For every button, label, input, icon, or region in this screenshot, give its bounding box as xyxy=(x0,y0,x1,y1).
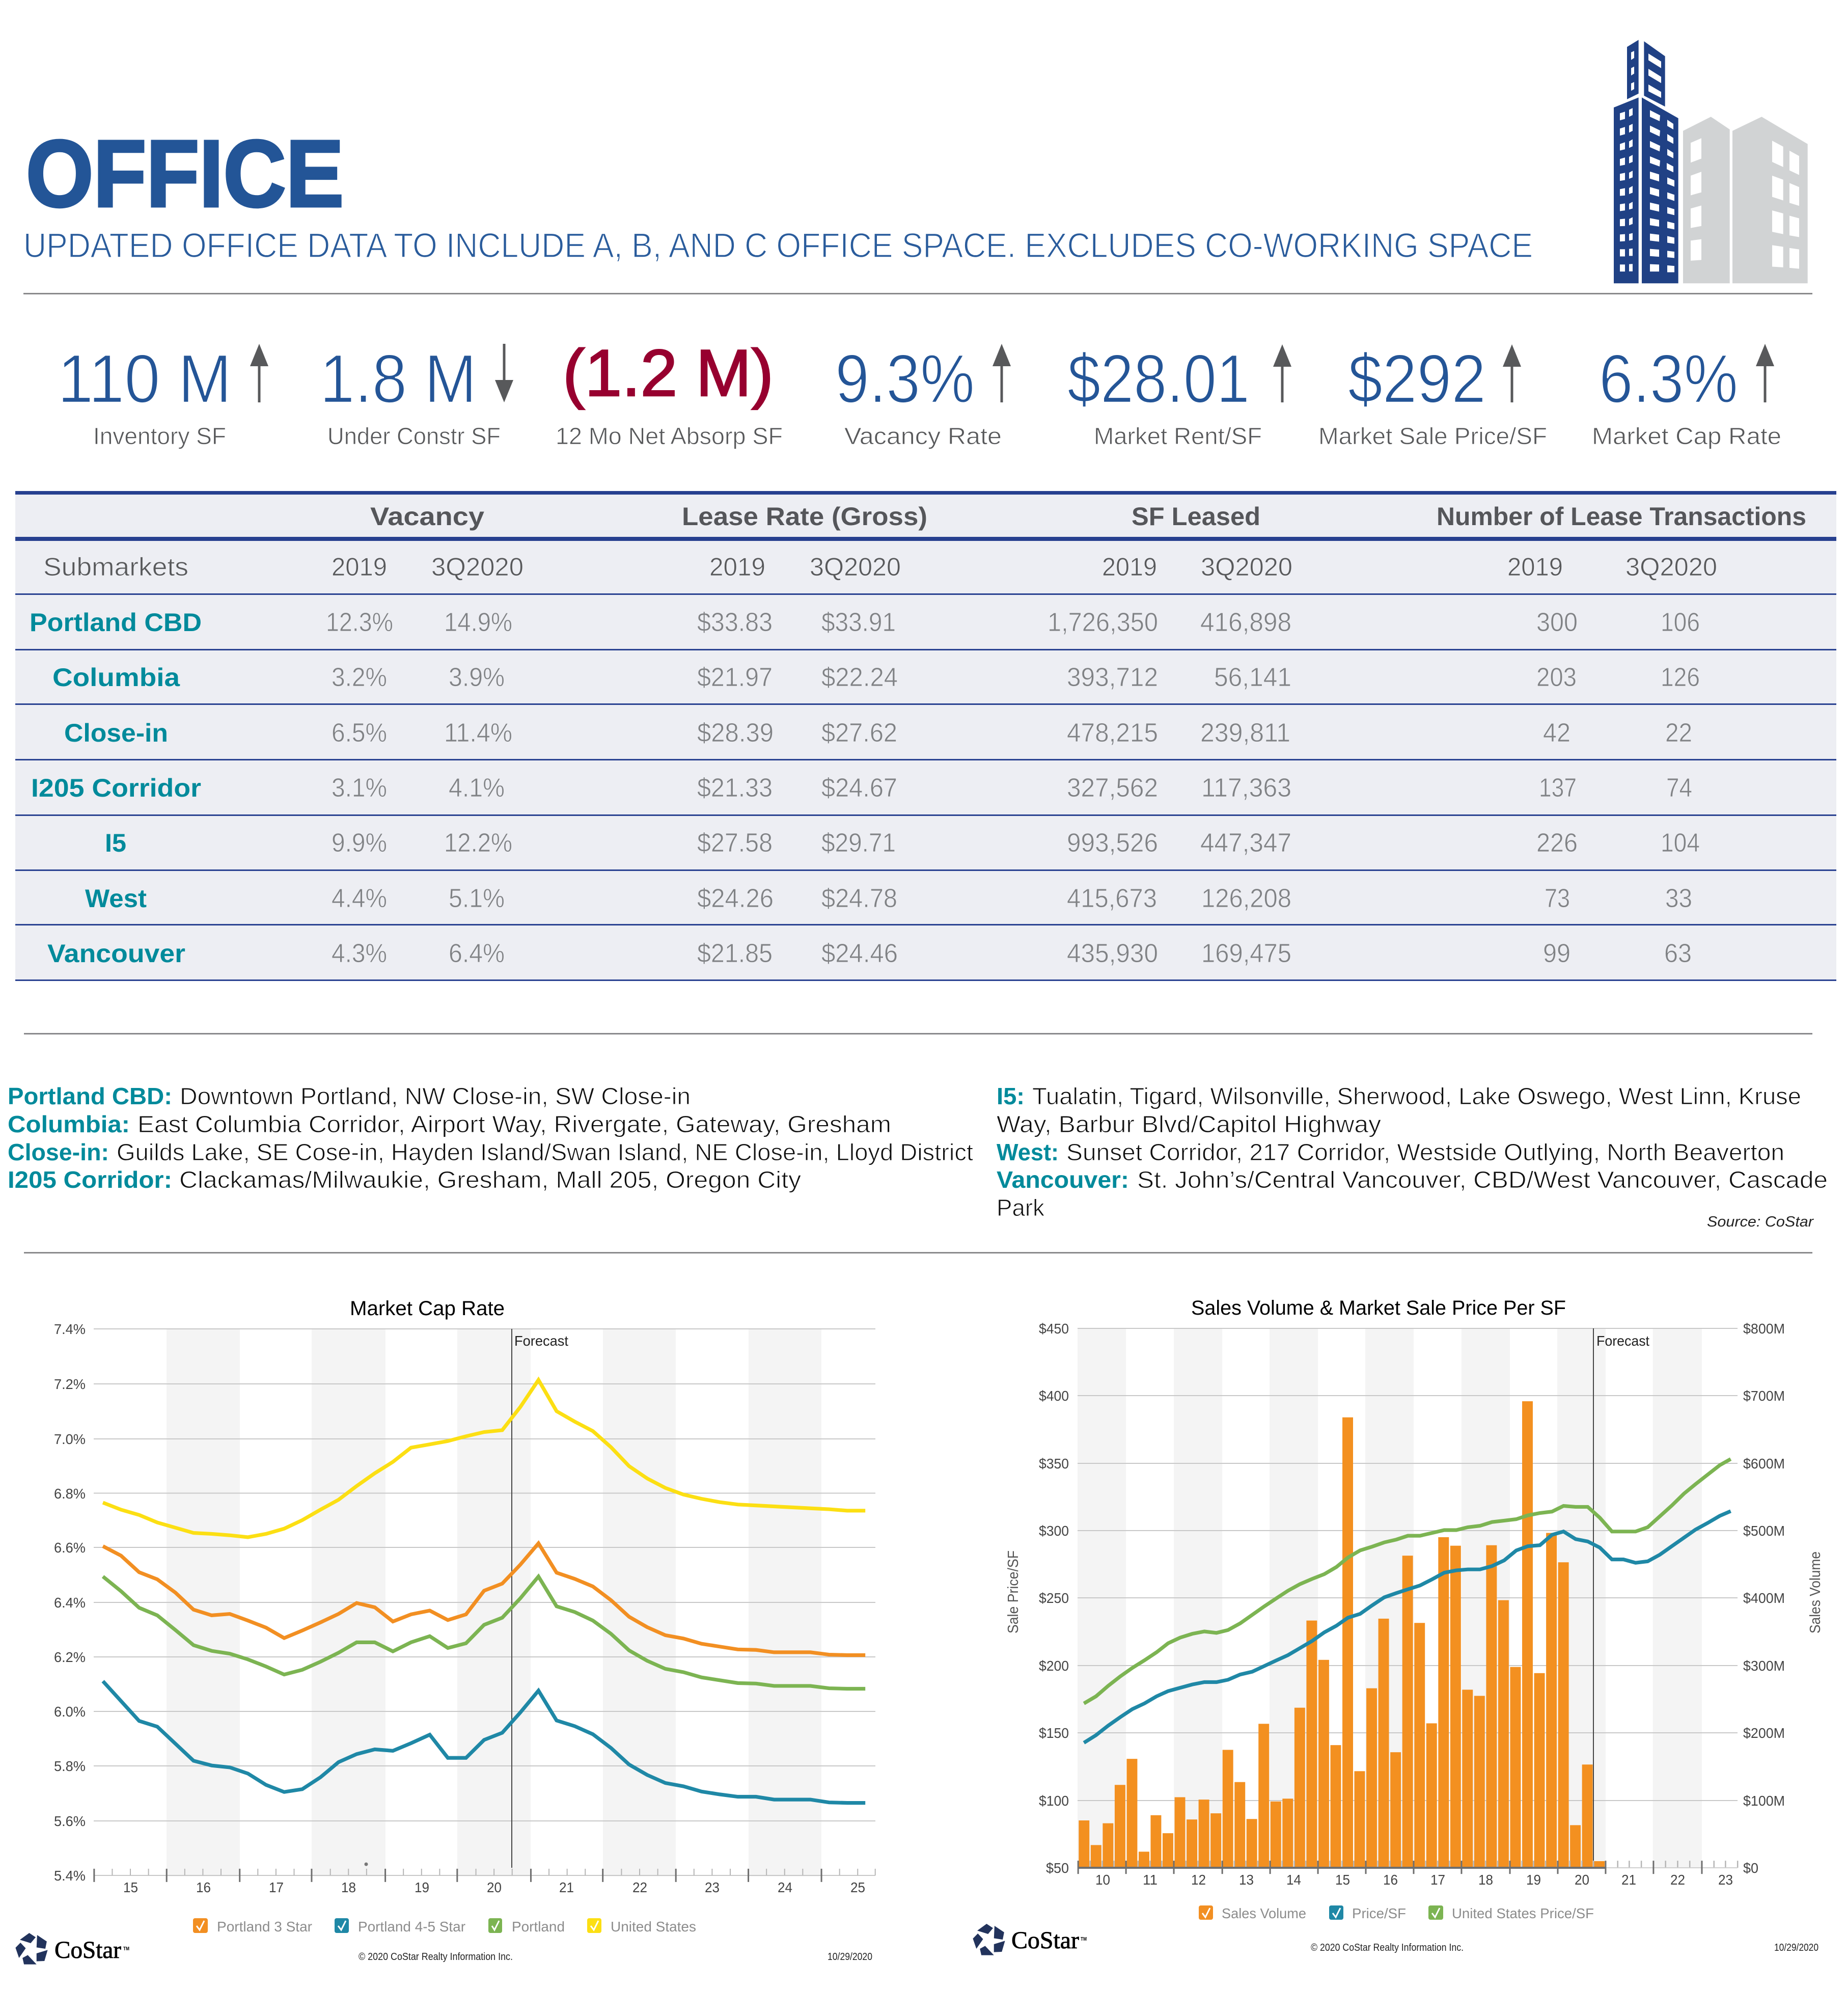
KPI: net absorption: (1.2 M) xyxy=(563,336,774,410)
x axis labels: 11 xyxy=(1143,1872,1158,1888)
row: Close-in: 11.4% xyxy=(444,718,512,748)
text block: submarket definitions right: St. John’s/Central Vancouver, CBD/West Vancouver, Cascade xyxy=(1137,1166,1828,1193)
title: OFFICE xyxy=(26,121,344,227)
logo: CoStar: TM xyxy=(1081,1937,1087,1942)
logo: CoStar: CoStar xyxy=(1011,1927,1079,1954)
row: West: 4.4% xyxy=(332,884,387,913)
right axis labels: $200M xyxy=(1743,1725,1785,1741)
x axis labels: 14 xyxy=(1286,1872,1301,1888)
KPI: sale price xyxy=(1318,340,1547,449)
y axis labels: 5.8% xyxy=(54,1758,86,1774)
text block: submarket definitions left: Portland CBD: xyxy=(8,1083,172,1109)
row: West: 415,673 xyxy=(1067,884,1157,913)
row: Vancouver: $21.85 xyxy=(697,939,773,968)
left axis labels xyxy=(1039,1321,1069,1876)
forecast marker: Forecast xyxy=(514,1333,568,1349)
x axis labels: 10 xyxy=(1095,1872,1110,1888)
row: West: West xyxy=(85,884,147,913)
row: Portland CBD xyxy=(30,608,1700,637)
text block: submarket definitions left: Close-in: xyxy=(8,1139,109,1165)
legend: Portland 3 Star xyxy=(217,1919,312,1935)
row: Vancouver: 4.3% xyxy=(332,939,387,968)
row: I205 Corridor: 3.1% xyxy=(332,773,387,803)
row: I205 Corridor: I205 Corridor xyxy=(31,774,201,802)
x axis labels: 15 xyxy=(1335,1872,1350,1888)
row: Columbia: Columbia xyxy=(52,663,180,692)
left axis labels: $300 xyxy=(1039,1523,1069,1539)
data lines xyxy=(1084,1459,1731,1743)
subtitle: UPDATED OFFICE DATA TO INCLUDE A, B, AND C OFFICE SPACE. EXCLUDES CO-WORKING SPACE xyxy=(23,226,1533,265)
copyright: © 2020 CoStar Realty Information Inc. xyxy=(1311,1942,1464,1953)
x axis labels: 21 xyxy=(559,1879,574,1895)
date: 10/29/2020 xyxy=(828,1951,872,1963)
row: West xyxy=(85,884,1692,913)
x axis labels: 18 xyxy=(341,1879,356,1895)
x axis labels: 23 xyxy=(1718,1872,1733,1888)
row: West: 5.1% xyxy=(449,884,505,913)
KPI: inventory xyxy=(58,340,268,449)
row: Close-in: Close-in xyxy=(64,719,168,747)
text block: submarket definitions right: Park xyxy=(997,1194,1045,1221)
text block: submarket definitions left: I205 Corridor: xyxy=(8,1166,172,1193)
line: price per SF xyxy=(1084,1511,1731,1743)
row: Close-in: 42 xyxy=(1543,718,1571,748)
table column headers: 3Q2020 xyxy=(431,553,524,581)
row: Vancouver: $24.46 xyxy=(821,939,898,968)
row: I205 Corridor: 117,363 xyxy=(1201,773,1291,803)
chart: sales volume and market sale price xyxy=(973,1297,1824,1955)
legend xyxy=(193,1918,696,1935)
left axis labels: $350 xyxy=(1039,1456,1069,1472)
x axis labels: 23 xyxy=(705,1879,720,1895)
y axis labels: 7.0% xyxy=(54,1431,86,1447)
row: I205 Corridor: 74 xyxy=(1666,773,1692,803)
legend xyxy=(1199,1905,1594,1921)
x axis labels: 16 xyxy=(196,1879,211,1895)
text block: submarket definitions right xyxy=(997,1083,1828,1221)
table column headers: 3Q2020 xyxy=(1201,553,1292,581)
x axis labels: 20 xyxy=(1575,1872,1589,1888)
row: Vancouver: Vancouver xyxy=(47,939,185,968)
line: United States price per SF xyxy=(1084,1459,1731,1703)
table group headers: Number of Lease Transactions xyxy=(1437,502,1806,531)
logo: CoStar xyxy=(15,1933,129,1965)
y axis labels: 5.4% xyxy=(54,1868,86,1884)
row: Close-in: 239,811 xyxy=(1200,718,1290,748)
text block: submarket definitions right: Way, Barbur Blvd/Capitol Highway xyxy=(997,1111,1381,1137)
legend: United States xyxy=(611,1919,696,1935)
axis title: Sales Volume: Sales Volume xyxy=(1807,1551,1824,1633)
right axis labels: $500M xyxy=(1743,1523,1785,1539)
row: West: 126,208 xyxy=(1201,884,1291,913)
KPI: market rent xyxy=(1067,340,1291,449)
legend: Price/SF xyxy=(1352,1905,1406,1921)
right axis labels: $400M xyxy=(1743,1590,1785,1606)
text block: submarket definitions right: Sunset Corridor, 217 Corridor, Westside Outlying, North Beaverton xyxy=(1066,1139,1784,1165)
row: Portland CBD: Portland CBD xyxy=(30,608,202,637)
row: Portland CBD: 106 xyxy=(1661,608,1700,637)
left axis labels: $100 xyxy=(1039,1793,1069,1809)
row: I205 Corridor: 137 xyxy=(1539,773,1577,803)
x axis labels: 18 xyxy=(1478,1872,1493,1888)
x axis labels: 19 xyxy=(1526,1872,1541,1888)
row: West: $24.78 xyxy=(821,884,897,913)
row: Close-in: 478,215 xyxy=(1067,718,1158,748)
KPI: sale price: Market Sale Price/SF xyxy=(1318,423,1547,449)
x axis labels: 17 xyxy=(269,1879,284,1895)
right axis labels: $600M xyxy=(1743,1456,1785,1472)
row: I5: 993,526 xyxy=(1067,828,1158,858)
table column headers: 3Q2020 xyxy=(810,553,901,581)
table column headers: 2019 xyxy=(709,553,765,581)
chart: market cap rate xyxy=(15,1297,875,1965)
left axis labels: $250 xyxy=(1039,1590,1069,1606)
y axis labels: 7.4% xyxy=(54,1321,86,1337)
x axis ticks xyxy=(1078,1861,1738,1874)
row: Portland CBD: 12.3% xyxy=(326,608,393,637)
row: I5: $29.71 xyxy=(821,828,896,858)
row: Columbia: 3.9% xyxy=(449,663,505,692)
row: West: 33 xyxy=(1665,884,1692,913)
y axis labels: 5.6% xyxy=(54,1813,86,1829)
KPI: cap rate: 6.3% xyxy=(1599,340,1738,417)
x axis labels: 25 xyxy=(850,1879,865,1895)
right axis labels xyxy=(1743,1321,1785,1876)
legend: Sales Volume xyxy=(1222,1905,1306,1921)
x axis labels: 17 xyxy=(1430,1872,1445,1888)
logo: CoStar: TM xyxy=(123,1946,129,1952)
data lines xyxy=(103,1380,865,1803)
row: Close-in xyxy=(64,718,1692,748)
y axis labels: 6.8% xyxy=(54,1486,86,1502)
text block: submarket definitions left: Guilds Lake, SE Cose-in, Hayden Island/Swan Island, NE Close-in, Lloyd District xyxy=(117,1139,973,1165)
text block: submarket definitions left: Clackamas/Milwaukie, Gresham, Mall 205, Oregon City xyxy=(179,1166,801,1193)
line: Portland 4-5 Star xyxy=(103,1681,865,1803)
row: Close-in: 6.5% xyxy=(332,718,387,748)
KPI: cap rate: Market Cap Rate xyxy=(1592,423,1781,449)
table column headers: 2019 xyxy=(332,553,387,581)
x axis labels: 21 xyxy=(1621,1872,1636,1888)
row: I205 Corridor xyxy=(31,773,1692,803)
row: I205 Corridor: 327,562 xyxy=(1067,773,1158,803)
row: Close-in: $28.39 xyxy=(697,718,774,748)
x axis labels: 20 xyxy=(487,1879,502,1895)
row: West: 73 xyxy=(1545,884,1570,913)
panel: submarket table xyxy=(15,491,1836,981)
table column headers: 2019 xyxy=(1507,553,1563,581)
KPI: net absorption xyxy=(556,336,783,449)
text block: submarket definitions right: I5: xyxy=(997,1083,1025,1109)
row: I5: 104 xyxy=(1661,828,1700,858)
row: Portland CBD: $33.91 xyxy=(821,608,896,637)
text block: submarket definitions left xyxy=(8,1083,973,1193)
left axis labels: $450 xyxy=(1039,1321,1069,1337)
row: Columbia: 126 xyxy=(1661,663,1700,692)
right axis labels: $700M xyxy=(1743,1388,1785,1404)
right axis labels: $0 xyxy=(1743,1860,1758,1876)
left axis labels: $50 xyxy=(1046,1860,1069,1876)
KPI: inventory: 110 M xyxy=(58,340,232,417)
text block: submarket definitions right: Tualatin, Tigard, Wilsonville, Sherwood, Lake Oswego, West Linn, Kruse xyxy=(1032,1083,1801,1109)
row: Columbia: 3.2% xyxy=(332,663,387,692)
row: I205 Corridor: $21.33 xyxy=(697,773,773,803)
row: I205 Corridor: 4.1% xyxy=(449,773,505,803)
KPI: vacancy rate xyxy=(835,340,1011,449)
row: Columbia xyxy=(52,663,1700,692)
row: Portland CBD: 300 xyxy=(1536,608,1578,637)
table column headers: Submarkets xyxy=(43,553,188,581)
row: I5: $27.58 xyxy=(697,828,773,858)
x axis labels xyxy=(123,1879,865,1895)
x axis labels: 13 xyxy=(1239,1872,1254,1888)
KPI: under construction: Under Constr SF xyxy=(327,423,501,449)
y axis labels xyxy=(54,1321,86,1884)
table group headers: SF Leased xyxy=(1132,502,1260,531)
right axis labels: $300M xyxy=(1743,1658,1785,1674)
text block: submarket definitions right: Vancouver: xyxy=(997,1166,1129,1193)
KPI: under construction: 1.8 M xyxy=(320,340,477,417)
y axis labels: 6.6% xyxy=(54,1540,86,1556)
x axis labels: 12 xyxy=(1191,1872,1206,1888)
logo: CoStar: CoStar xyxy=(54,1937,121,1964)
row: Portland CBD: 1,726,350 xyxy=(1048,608,1158,637)
row: I5: 9.9% xyxy=(332,828,387,858)
legend: Portland 4-5 Star xyxy=(358,1919,465,1935)
text block: submarket definitions left: Downtown Portland, NW Close-in, SW Close-in xyxy=(180,1083,691,1109)
row: I5: I5 xyxy=(105,829,126,857)
KPI: vacancy rate: 9.3% xyxy=(835,340,975,417)
KPI: market rent: $28.01 xyxy=(1067,340,1250,417)
bars: sales volume xyxy=(1079,1401,1605,1868)
row: I5 xyxy=(105,828,1700,858)
y axis labels: 6.0% xyxy=(54,1704,86,1720)
KPI: under construction xyxy=(320,340,513,449)
KPI: cap rate xyxy=(1592,340,1781,449)
KPI strip xyxy=(58,336,1781,449)
row: Portland CBD: 14.9% xyxy=(444,608,512,637)
y axis labels: 6.4% xyxy=(54,1595,86,1611)
row: Vancouver: 435,930 xyxy=(1067,939,1158,968)
row: Columbia: $22.24 xyxy=(821,663,898,692)
KPI: vacancy rate: Vacancy Rate xyxy=(844,423,1002,449)
chart title: Market Cap Rate xyxy=(350,1297,505,1320)
row: I205 Corridor: $24.67 xyxy=(821,773,897,803)
right axis labels: $100M xyxy=(1743,1793,1785,1809)
row: Close-in: 22 xyxy=(1665,718,1692,748)
text block: submarket definitions left: East Columbia Corridor, Airport Way, Rivergate, Gateway, Gresham xyxy=(137,1111,891,1137)
KPI: net absorption: 12 Mo Net Absorp SF xyxy=(556,423,783,449)
row: Portland CBD: 416,898 xyxy=(1200,608,1291,637)
table column headers xyxy=(43,553,1717,581)
table column headers: 3Q2020 xyxy=(1625,553,1717,581)
table group headers: Lease Rate (Gross) xyxy=(682,502,927,531)
row: West: $24.26 xyxy=(697,884,774,913)
table group headers: Vacancy xyxy=(370,502,484,531)
left axis labels: $200 xyxy=(1039,1658,1069,1674)
table group headers xyxy=(370,502,1806,531)
table column headers: 2019 xyxy=(1102,553,1157,581)
row: Vancouver: 6.4% xyxy=(449,939,505,968)
chart title: Sales Volume & Market Sale Price Per SF xyxy=(1191,1297,1566,1319)
KPI: inventory: Inventory SF xyxy=(93,423,226,449)
left axis labels: $400 xyxy=(1039,1388,1069,1404)
row: I5: 12.2% xyxy=(444,828,512,858)
x axis ticks xyxy=(94,1869,875,1882)
row: I5: 226 xyxy=(1536,828,1578,858)
y axis labels: 6.2% xyxy=(54,1649,86,1665)
x axis labels: 16 xyxy=(1383,1872,1398,1888)
logo: CoStar xyxy=(973,1924,1087,1955)
date: 10/29/2020 xyxy=(1774,1942,1819,1953)
x axis labels: 22 xyxy=(632,1879,647,1895)
x axis labels: 24 xyxy=(778,1879,792,1895)
row: Columbia: $21.97 xyxy=(697,663,773,692)
legend: Portland xyxy=(512,1919,565,1935)
x axis labels xyxy=(1095,1872,1733,1888)
text block: submarket definitions right: West: xyxy=(997,1139,1059,1165)
row: I5: 447,347 xyxy=(1200,828,1291,858)
x axis labels: 15 xyxy=(123,1879,138,1895)
row: Vancouver: 63 xyxy=(1664,939,1692,968)
forecast marker: Forecast xyxy=(1596,1333,1649,1349)
row: Columbia: 203 xyxy=(1536,663,1577,692)
row: Close-in: $27.62 xyxy=(821,718,897,748)
row: Vancouver: 99 xyxy=(1543,939,1571,968)
y axis labels: 7.2% xyxy=(54,1376,86,1392)
left axis labels: $150 xyxy=(1039,1725,1069,1741)
x axis labels: 19 xyxy=(415,1879,429,1895)
right axis labels: $800M xyxy=(1743,1321,1785,1337)
copyright: © 2020 CoStar Realty Information Inc. xyxy=(359,1951,513,1963)
line: Portland 3 Star xyxy=(103,1543,865,1655)
row: Vancouver: 169,475 xyxy=(1201,939,1291,968)
line: Portland xyxy=(103,1576,865,1689)
row: Columbia: 393,712 xyxy=(1067,663,1158,692)
icon: office buildings xyxy=(1614,40,1808,283)
row: Portland CBD: $33.83 xyxy=(697,608,773,637)
x axis labels: 22 xyxy=(1670,1872,1685,1888)
KPI: market rent: Market Rent/SF xyxy=(1094,423,1262,449)
line: United States xyxy=(103,1380,865,1537)
text block: submarket definitions left: Columbia: xyxy=(8,1111,130,1137)
source note: Source: CoStar xyxy=(1707,1214,1814,1230)
row: Vancouver xyxy=(47,939,1692,968)
legend: United States Price/SF xyxy=(1452,1905,1594,1921)
KPI: sale price: $292 xyxy=(1348,340,1486,417)
axis title: Sale Price/SF: Sale Price/SF xyxy=(1005,1550,1022,1633)
row: Columbia: 56,141 xyxy=(1214,663,1291,692)
